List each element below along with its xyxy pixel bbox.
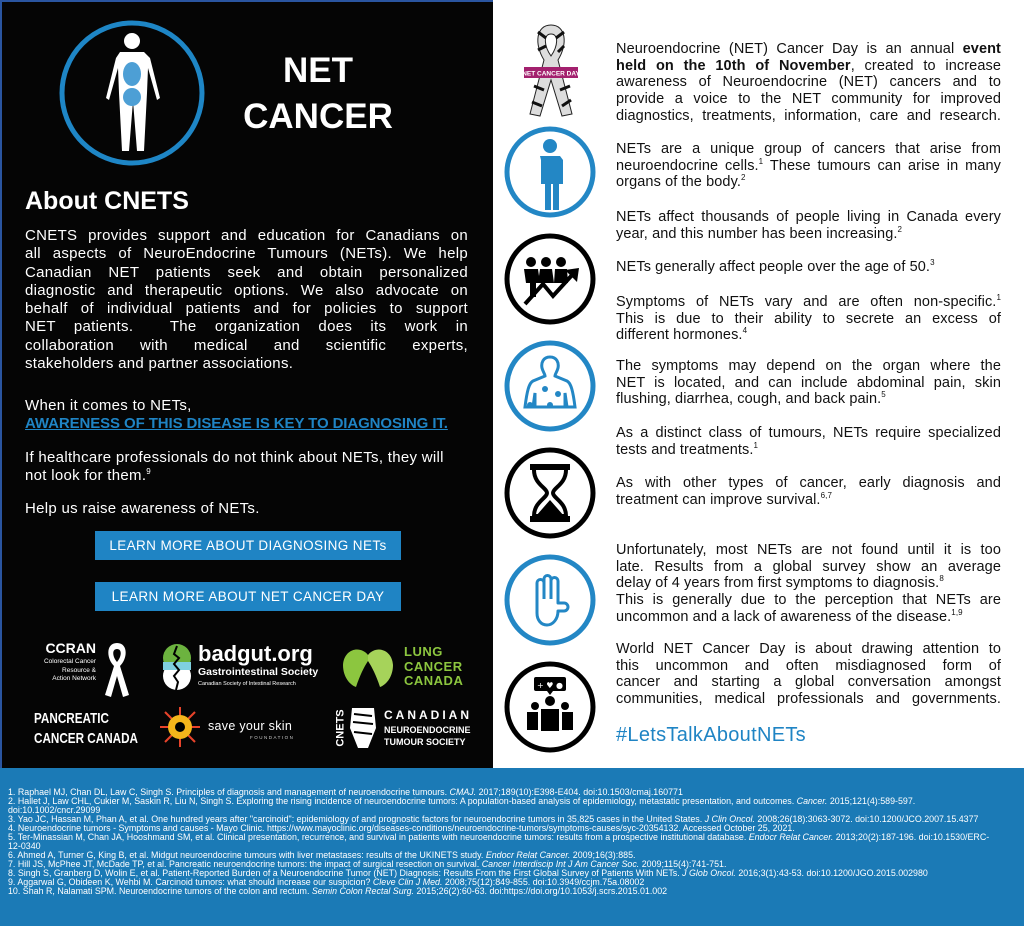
references band: 5. Ter-Minassian M, Chan JA, Hooshmand SM, et al. Clinical presentation, recurrence, and survival in patients with neuroendocrine tumors: results from a prospective institutional database. Endocr Relat Cancer. 2013;20(2):187-196. doi:10.1530/ERC- xyxy=(8,832,989,842)
text: delay: delay of 4 years from first symptoms to diagnosis.8 xyxy=(616,575,944,591)
text: about paragraph: behalf of individual patients and for policies to support xyxy=(25,300,468,317)
text: symptoms vary: This is due to their ability to secrete an excess of xyxy=(616,311,1001,327)
logo: CNETS Canadian Neuroendocrine Tumour Society: CANADIAN xyxy=(384,708,472,722)
text: awareness callout xyxy=(25,397,448,432)
logo: CCRAN: CCRAN xyxy=(45,640,96,656)
references band: 9. Aggarwal G, Obideen K, Wehbi M. Carcinoid tumors: what should increase our suspicion? Cleve Clin J Med. 2008;75(12):849-855. doi:10.3949/ccjm.75a.08002 xyxy=(8,877,644,887)
text: early diagnosis: treatment can improve survival.6,7 xyxy=(616,491,832,508)
text: NET Cancer Day intro: diagnostics, treatments, information, care and research. xyxy=(616,108,1001,124)
references band: 6. Ahmed A, Turner G, King B, et al. Midgut neuroendocrine tumours with liver metastases: results of the UKINETS study. Endocr Relat Cancer. 2009;16(3):885. xyxy=(8,850,635,860)
logo: Pancreatic Cancer Canada xyxy=(34,710,138,747)
logo: Pancreatic Cancer Canada: PANCREATIC xyxy=(34,710,109,727)
title: NET CANCER: CANCER xyxy=(243,97,393,136)
logo: Pancreatic Cancer Canada: CANCER CANADA xyxy=(34,730,138,747)
references band: 12-0340 xyxy=(8,841,41,851)
text: symptoms organ: flushing, diarrhea, cough, and back pain.5 xyxy=(616,391,886,407)
text: NET Cancer Day intro: awareness of Neuroendocrine (NET) cancers and to xyxy=(616,74,1001,90)
text: World NET Cancer Day: this uncommon and often misdiagnosed form of xyxy=(616,658,1001,674)
hashtag: #LetsTalkAboutNETs xyxy=(616,724,806,746)
logo: Save your skin xyxy=(160,707,294,747)
button: NET cancer day xyxy=(95,582,401,611)
logo: Save your skin: save your skin xyxy=(208,719,292,733)
text: help us: Help us raise awareness of NETs. xyxy=(25,500,260,517)
text: specialized tests xyxy=(616,425,1001,458)
text: NETs unique group: neuroendocrine cells.1 These tumours can arise in many xyxy=(616,157,1001,174)
references band: 4. Neuroendocrine tumors - Symptoms and causes - Mayo Clinic. https://www.mayoclinic.org/diseases-conditions/neuroendocrine-tumors/symptoms-causes/syc-20354132. Accessed October 25, 2021. xyxy=(8,823,795,833)
logo: badgut.org: Canadian Society of Intestinal Research xyxy=(198,681,296,687)
button: diagnosing xyxy=(95,531,401,560)
text: awareness callout: When it comes to NETs, xyxy=(25,397,192,414)
text: World NET Cancer Day: World NET Cancer Day is about drawing attention to xyxy=(616,641,1001,657)
logo: CNETS Canadian Neuroendocrine Tumour Society: TUMOUR SOCIETY xyxy=(384,737,466,747)
text: specialized tests: tests and treatments.1 xyxy=(616,441,758,458)
text: NET Cancer Day intro xyxy=(616,41,1001,124)
text: NETs affect thousands: year, and this number has been increasing.2 xyxy=(616,225,902,242)
text: delay: late. Results from a global survey show an average xyxy=(616,559,1001,575)
text: specialized tests: As a distinct class of tumours, NETs require specialized xyxy=(616,425,1001,441)
text: NETs unique group xyxy=(616,141,1001,190)
title: NET CANCER: NET xyxy=(283,51,353,90)
icon: person (blue circle) xyxy=(504,126,596,218)
logo: CNETS Canadian Neuroendocrine Tumour Society: NEUROENDOCRINE xyxy=(384,725,471,735)
references band: 3. Yao JC, Hassan M, Phan A, et al. One hundred years after "carcinoid": epidemiology of and prognostic factors for neuroendocrine tumors in 35,825 cases in the United States. J Clin Oncol. 2008;26(18):3063-3072. doi:10.1200/JCO.2007.15.4377 xyxy=(8,814,978,824)
icon: people with rising arrow xyxy=(504,234,596,324)
text: symptoms organ: NET is located, and can include abdominal pain, skin xyxy=(616,375,1001,391)
logo: CCRAN: Colorectal Cancer xyxy=(44,658,96,665)
text: over age 50: NETs generally affect people over the age of 50.3 xyxy=(616,258,935,275)
text: about paragraph: NET patients. The organization does its work in xyxy=(25,318,468,335)
text: healthcare professionals xyxy=(25,449,444,484)
icon: raised hand xyxy=(504,554,596,646)
text: about paragraph: all aspects of NeuroEndocrine Tumours (NETs). We help xyxy=(25,245,468,262)
references band: 8. Singh S, Granberg D, Wolin E, et al. Patient-Reported Burden of a Neuroendocrine Tumor (NET) Diagnosis: Results From the First Global Survey of Patients With NETs. J Glob Oncol. 2016;3(1):43-53. doi:10.1200/JGO.2015.002980 xyxy=(8,868,928,878)
references band: doi:10.1002/cncr.29099 xyxy=(8,805,100,815)
text: symptoms vary: Symptoms of NETs vary and are often non-specific.1 xyxy=(616,293,1001,310)
logo: CNETS Canadian Neuroendocrine Tumour Society: CNETS xyxy=(335,709,347,747)
references band: 7. Hill JS, McPhee JT, McDade TP, et al. Pancreatic neuroendocrine tumors: the impact of surgical resection on survival. Cancer Interdiscip Int J Am Cancer Soc. 2009;115(4):741-751. xyxy=(8,859,726,869)
text: symptoms vary xyxy=(616,293,1001,343)
icon: community conversation: + ♥ ● xyxy=(537,681,563,690)
logo: badgut.org xyxy=(163,641,318,690)
logo: CCRAN: Action Network xyxy=(52,675,96,682)
icon: zebra ribbon NET Cancer Day xyxy=(524,24,578,117)
text: NETs affect thousands xyxy=(616,209,1001,242)
logo: CCRAN: Resource & xyxy=(62,666,96,674)
references band: 2. Hallet J, Law CHL, Cukier M, Saskin R, Liu N, Singh S. Exploring the rising incidence of neuroendocrine tumors: A population-based analysis of epidemiology, metastatic presentation, and outcomes. Cancer. 2015;121(4):589-597. xyxy=(8,796,915,806)
text: World NET Cancer Day: communities, medical professionals and governments. xyxy=(616,691,1001,707)
text: NET Cancer Day intro: provide a voice to the NET community for improved xyxy=(616,91,1001,107)
logo: Lung Cancer Canada: CANADA xyxy=(404,673,463,688)
icon: body with spots xyxy=(504,340,596,432)
logo: badgut.org: Gastrointestinal Society xyxy=(198,666,318,678)
text: NETs unique group: NETs are a unique group of cancers that arise from xyxy=(616,141,1001,157)
text: perception: uncommon and a lack of awareness of the disease.1,9 xyxy=(616,608,963,625)
text: about paragraph: Canadian NET patients seek and obtain personalized xyxy=(25,264,468,281)
text: symptoms organ: The symptoms may depend on the organ where the xyxy=(616,358,1001,374)
text: delay xyxy=(616,542,1001,591)
text: about paragraph: stakeholders and partner associations. xyxy=(25,355,293,372)
icon: human body in circle xyxy=(60,20,204,166)
logo: CNETS Canadian Neuroendocrine Tumour Society xyxy=(335,708,472,748)
text: symptoms organ xyxy=(616,358,1001,407)
text: about paragraph: collaboration with medical and scientific experts, xyxy=(25,337,468,354)
text: World NET Cancer Day: cancer and starting a global conversation amongst xyxy=(616,674,1001,690)
text: NETs affect thousands: NETs affect thousands of people living in Canada every xyxy=(616,209,1001,225)
text: NET Cancer Day intro: Neuroendocrine (NET) Cancer Day is an annual event xyxy=(616,41,1001,57)
references band xyxy=(0,768,1024,926)
icon: hourglass xyxy=(504,448,596,538)
logo: Save your skin: FOUNDATION xyxy=(250,735,294,740)
text: NET Cancer Day intro: held on the 10th of November, created to increase xyxy=(616,58,1001,74)
text: NETs unique group: organs of the body.2 xyxy=(616,174,746,190)
logo: CCRAN xyxy=(44,640,129,697)
text: about paragraph: CNETS provides support and education for Canadians on xyxy=(25,227,468,244)
logo: Lung Cancer Canada: CANCER xyxy=(404,658,463,674)
references band: 1. Raphael MJ, Chan DL, Law C, Singh S. Principles of diagnosis and management of neuroendocrine tumours. CMAJ. 2017;189(10):E398-E404. doi:10.1503/cmaj.160771 xyxy=(8,787,683,797)
text: healthcare professionals: If healthcare professionals do not think about NETs, they will xyxy=(25,449,444,466)
logo: badgut.org: badgut.org xyxy=(198,641,313,666)
title: NET CANCER xyxy=(243,51,393,136)
logo: Lung Cancer Canada xyxy=(343,644,463,688)
text: about paragraph xyxy=(25,227,468,372)
text: early diagnosis: As with other types of cancer, early diagnosis and xyxy=(616,475,1001,491)
text: symptoms vary: different hormones.4 xyxy=(616,327,747,343)
references band: 10. Shah R, Nalamati SPM. Neuroendocrine tumors of the colon and rectum. Semin Colon Rectal Surg. 2015;26(2):60-63. doi:https://doi.org/10.1053/j.scrs.2015.01.002 xyxy=(8,886,667,896)
text: about paragraph: diagnostic and therapeutic options. We also advocate on xyxy=(25,282,468,299)
button: diagnosing: LEARN MORE ABOUT DIAGNOSING NETs xyxy=(109,538,387,553)
text: early diagnosis xyxy=(616,475,1001,508)
text: World NET Cancer Day xyxy=(616,641,1001,707)
text: awareness callout: AWARENESS OF THIS DISEASE IS KEY TO DIAGNOSING IT. xyxy=(25,415,448,432)
text: delay: Unfortunately, most NETs are not found until it is too xyxy=(616,542,1001,558)
logo: Lung Cancer Canada: LUNG xyxy=(404,644,443,659)
text: perception: This is generally due to the perception that NETs are xyxy=(616,592,1001,608)
text: perception xyxy=(616,592,1001,625)
button: NET cancer day: LEARN MORE ABOUT NET CANCER DAY xyxy=(112,589,384,604)
text: healthcare professionals: not look for them.9 xyxy=(25,467,151,484)
heading: About CNETS: About CNETS xyxy=(25,187,189,215)
icon: community conversation xyxy=(504,662,596,752)
panel: left about CNETS xyxy=(0,0,493,768)
